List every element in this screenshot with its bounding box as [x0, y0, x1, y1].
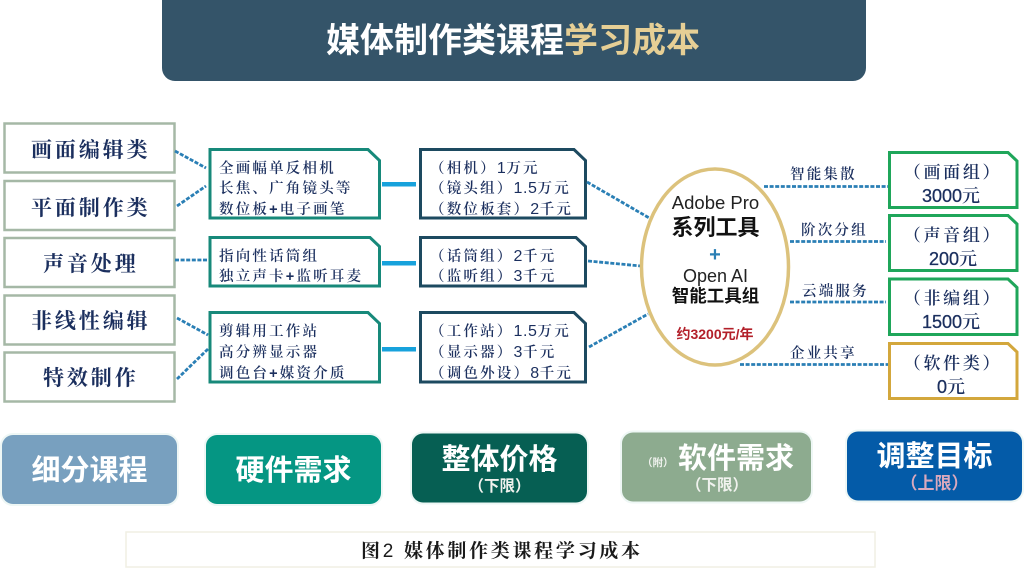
column heading: adjustment target: 调整目标 [876, 440, 993, 473]
panel: course categories: 声音处理 [43, 253, 139, 276]
connectors: hardware to prices [382, 182, 416, 352]
panel: software tools ellipse: 约3200元/年 [676, 326, 754, 342]
labels: optimization methods: 阶次分组 [801, 221, 868, 239]
column heading: adjustment target [847, 432, 1022, 500]
panel: course categories [4, 124, 174, 402]
panel: course categories: 非线性编辑 [31, 310, 150, 333]
labels: optimization methods: 云端服务 [802, 282, 869, 300]
panel: hardware requirements: 调色台+媒资介质 [219, 364, 347, 382]
panel: adjustment targets: （声音组） [904, 225, 1002, 245]
connectors: prices to software ellipse [587, 182, 651, 347]
title banner: 媒体制作类课程学习成本 [326, 22, 700, 60]
panel: adjustment targets: （软件类） [904, 354, 1002, 373]
panel: hardware requirements: 剪辑用工作站 [219, 322, 319, 340]
column heading: course breakdown: 细分课程 [31, 454, 148, 487]
panel: software tools ellipse: + [709, 244, 721, 266]
panel: hardware requirements [210, 150, 380, 382]
panel: overall prices: （话筒组）2千元 [430, 248, 556, 265]
panel: adjustment targets: 1500元 [922, 308, 980, 334]
panel: hardware requirements: 高分辨显示器 [219, 343, 319, 361]
column heading: software needs [622, 432, 811, 502]
panel: course categories: 画面编辑类 [31, 139, 150, 162]
panel: hardware requirements: 指向性话筒组 [219, 247, 319, 265]
column heading: course breakdown [2, 435, 177, 504]
connectors: ellipse to adjustment targets [740, 186, 889, 364]
panel: overall prices: （相机）1万元 [430, 159, 540, 177]
panel: overall prices: （调色外设）8千元 [430, 365, 573, 382]
column heading: adjustment target: （上限） [900, 474, 968, 493]
labels: optimization methods [790, 165, 869, 362]
panel: overall prices [420, 150, 586, 382]
column heading: overall price: （下限） [468, 477, 531, 495]
labels: optimization methods: 智能集散 [790, 165, 857, 183]
panel: hardware requirements: 长焦、广角镜头等 [219, 179, 353, 197]
panel: adjustment targets: （画面组） [904, 163, 1002, 182]
panel: adjustment targets: 200元 [929, 245, 977, 271]
column heading: hardware needs [206, 435, 381, 504]
column heading: software needs: （附） [642, 456, 674, 469]
panel: hardware requirements: 全画幅单反相机 [219, 159, 336, 177]
panel: adjustment targets [890, 152, 1017, 399]
panel: course categories: 平面制作类 [31, 197, 150, 220]
panel: overall prices: （数位板套）2千元 [430, 200, 573, 218]
caption [126, 532, 875, 567]
panel: software tools ellipse [642, 169, 788, 365]
panel: overall prices: （监听组）3千元 [430, 267, 556, 285]
panel: hardware requirements: 独立声卡+监听耳麦 [219, 267, 363, 285]
panel: overall prices: （镜头组）1.5万元 [430, 179, 571, 197]
caption: 图2 媒体制作类课程学习成本 [361, 540, 643, 562]
connectors: categories to hardware [175, 151, 209, 379]
panel: overall prices: （显示器）3千元 [430, 344, 556, 361]
panel: course categories: 特效制作 [43, 367, 139, 390]
panel: adjustment targets: （非编组） [904, 289, 1002, 308]
panel: overall prices: （工作站）1.5万元 [430, 322, 571, 340]
panel: software tools ellipse: 系列工具 [671, 215, 760, 240]
panel: software tools ellipse: 智能工具组 [672, 286, 759, 306]
panel: adjustment targets: 0元 [937, 373, 965, 399]
panel: hardware requirements: 数位板+电子画笔 [219, 200, 347, 218]
panel: adjustment targets: 3000元 [922, 182, 980, 208]
labels: optimization methods: 企业共享 [790, 344, 857, 362]
column heading: hardware needs: 硬件需求 [235, 454, 352, 487]
panel: software tools ellipse: Open AI [683, 266, 748, 286]
column heading: overall price: 整体价格 [441, 443, 558, 476]
panel: software tools ellipse: Adobe Pro [672, 192, 759, 213]
column heading: overall price [412, 434, 587, 502]
title banner [162, 0, 866, 81]
column heading: software needs: （下限） [686, 476, 748, 494]
column heading: software needs: 软件需求 [678, 442, 794, 475]
